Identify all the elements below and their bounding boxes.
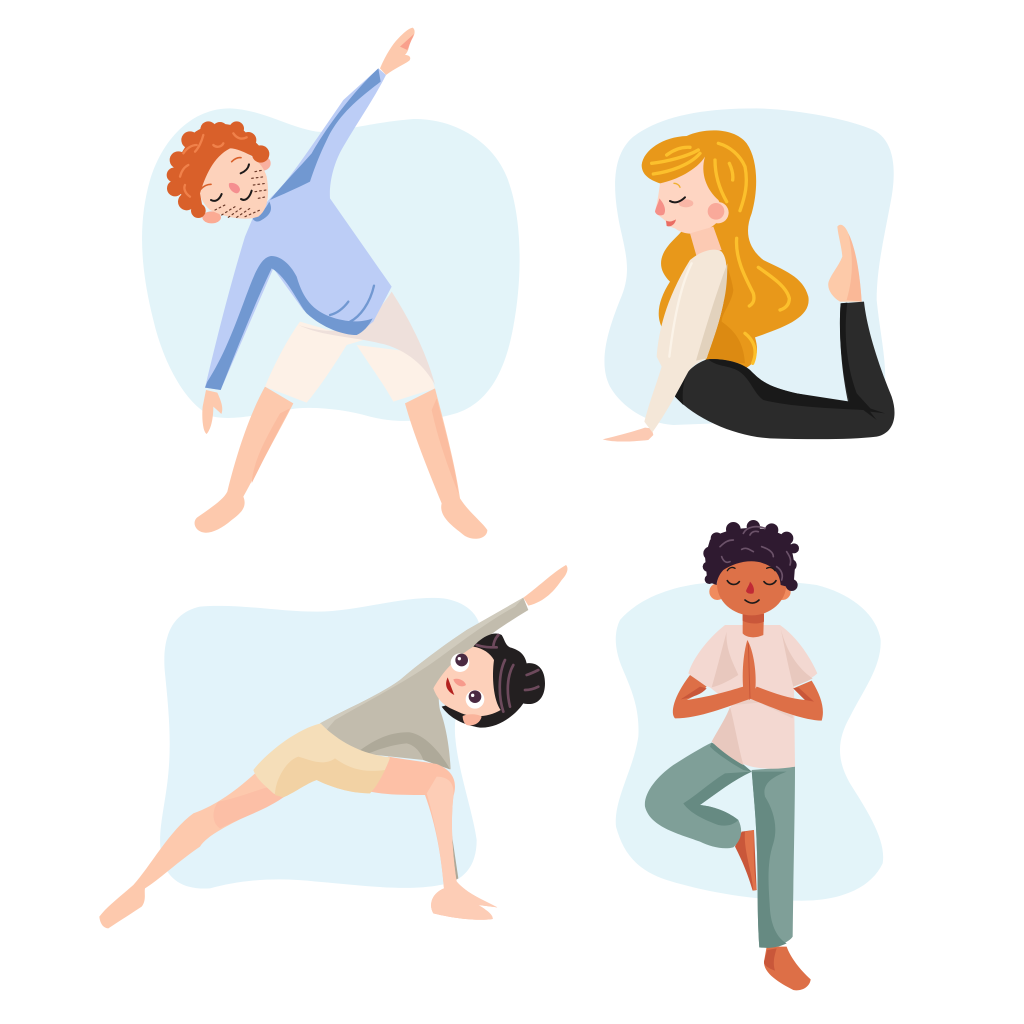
bent pant leg — [645, 743, 752, 848]
sweater lighter sleeve — [320, 598, 523, 732]
raised hand — [523, 565, 567, 606]
sweater — [205, 68, 392, 390]
panel: woman in side angle pose — [99, 565, 567, 928]
bent pant shadow — [683, 743, 752, 826]
hair — [703, 520, 799, 591]
hair curls — [180, 133, 247, 197]
face — [655, 157, 722, 234]
background blob — [616, 581, 883, 901]
hair shadow — [703, 220, 745, 363]
leggings shadow — [675, 303, 885, 420]
sweater folds — [330, 286, 374, 322]
sweater — [320, 598, 528, 769]
shorts right — [357, 345, 435, 402]
sweater base — [644, 250, 727, 432]
eyebrow — [674, 183, 680, 187]
right arm — [749, 681, 823, 721]
far arm behind leg — [452, 833, 458, 882]
right leg — [405, 388, 487, 539]
standing pant leg — [752, 767, 795, 947]
panel: woman in king pigeon pose — [603, 108, 895, 442]
hair back — [642, 130, 809, 368]
standing pant shadow — [752, 770, 787, 948]
sweater collar — [253, 202, 271, 222]
stubble — [215, 170, 267, 217]
nose — [229, 183, 240, 193]
hair highlights — [477, 635, 538, 712]
eyes — [727, 581, 776, 584]
nose — [746, 582, 754, 594]
nose — [655, 198, 665, 215]
eyebrows — [201, 158, 241, 189]
mouth — [745, 600, 759, 603]
shorts — [253, 723, 390, 797]
neck — [690, 227, 722, 257]
sweater underarm shadow — [358, 732, 450, 769]
sweater shadow lower arm and hem — [205, 256, 373, 390]
ear — [463, 714, 482, 725]
hair highlights — [652, 143, 789, 363]
hair — [442, 633, 545, 728]
foot on leg — [735, 830, 757, 891]
ear near — [202, 211, 221, 223]
background blob — [142, 108, 520, 421]
left leg — [195, 387, 293, 533]
lips — [666, 219, 676, 226]
sweater highlight — [669, 263, 692, 357]
shirt — [688, 625, 817, 769]
face — [433, 647, 501, 716]
closed eye — [670, 197, 685, 202]
front leg — [370, 757, 497, 920]
shorts shadow — [298, 292, 435, 385]
shirt shadow under arms — [733, 698, 793, 718]
eyes — [451, 653, 484, 709]
raised hand — [380, 28, 415, 75]
panel: man in tree pose — [616, 520, 883, 990]
ear — [707, 202, 729, 223]
sleeve shadows — [712, 628, 813, 687]
blush — [679, 199, 693, 207]
standing foot — [764, 947, 811, 990]
sweater shadow — [696, 263, 727, 361]
face — [717, 553, 786, 615]
left arm — [673, 675, 752, 718]
leg shading — [252, 398, 458, 493]
sweater shadow upper arm — [270, 68, 381, 200]
praying hands — [743, 640, 756, 700]
front shin lighter — [427, 777, 497, 920]
hair curls — [720, 527, 791, 580]
nose — [453, 679, 466, 686]
hair — [167, 121, 269, 218]
leggings — [675, 302, 895, 439]
foot — [828, 225, 862, 302]
background blob — [160, 598, 480, 889]
hand — [603, 428, 653, 442]
shirt shadow lower — [712, 707, 743, 765]
ear far — [255, 156, 271, 171]
neck — [743, 613, 764, 637]
ears — [709, 583, 725, 600]
shorts left — [265, 322, 363, 403]
back leg — [99, 773, 287, 928]
background blob — [604, 108, 894, 425]
eyes — [211, 164, 252, 201]
lowered hand — [202, 390, 222, 434]
back leg shading — [214, 787, 287, 828]
arm shadows — [681, 687, 814, 702]
shorts shadow — [275, 757, 385, 797]
face — [198, 147, 268, 219]
mouth — [446, 677, 454, 695]
eyebrows — [727, 567, 775, 571]
panel: man in triangle pose — [142, 28, 520, 539]
